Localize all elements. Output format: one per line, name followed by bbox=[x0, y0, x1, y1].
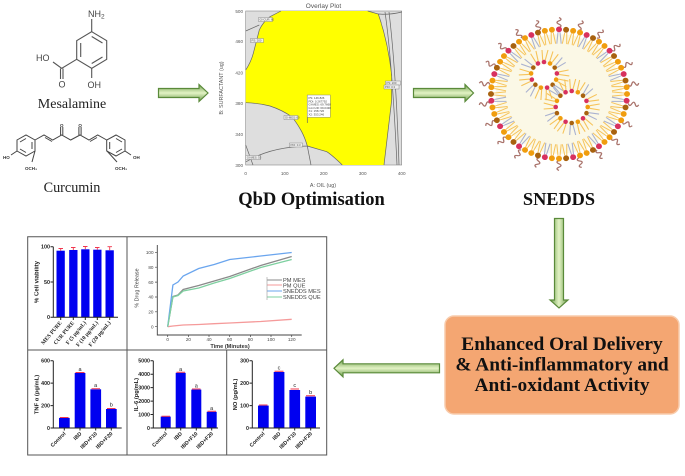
labels: IBD+F10 bbox=[279, 431, 298, 451]
tick labels: 300 bbox=[359, 171, 367, 176]
icon: mesalamine structure: HO bbox=[36, 53, 50, 63]
axis titles: A: OIL (ug) bbox=[310, 183, 336, 189]
chart: drug release: % Drug Release bbox=[134, 268, 140, 308]
tick labels: 100 bbox=[267, 337, 275, 342]
category labels: CUR PURE bbox=[53, 320, 76, 346]
prediction flag: PS: 146.826 bbox=[308, 96, 325, 100]
tick labels bbox=[235, 9, 406, 176]
tick labels: 380 bbox=[235, 101, 243, 106]
tick labels: 400 bbox=[398, 171, 406, 176]
contour lines bbox=[246, 11, 402, 165]
labels: IBD bbox=[73, 431, 84, 442]
labels: IBD bbox=[173, 431, 184, 442]
significance letters bbox=[179, 367, 214, 412]
axes bbox=[50, 247, 118, 320]
tick labels: 100 bbox=[146, 250, 154, 255]
tick labels: 100 bbox=[281, 171, 289, 176]
tick labels: 60 bbox=[227, 337, 233, 342]
axis titles bbox=[219, 61, 336, 189]
icon: curcumin structure bbox=[3, 123, 140, 171]
labels: 0 bbox=[246, 426, 249, 432]
tick labels: 340 bbox=[235, 132, 243, 137]
labels: NO (pg/mL) bbox=[233, 379, 239, 410]
labels: 100 bbox=[240, 404, 249, 410]
axes bbox=[250, 361, 320, 430]
significance letters: a bbox=[179, 367, 183, 373]
prediction flag: GI-CUR: 69.0438 bbox=[308, 106, 331, 110]
icon: curcumin structure: O bbox=[78, 123, 82, 128]
error bars bbox=[58, 246, 112, 251]
tick labels: 0 bbox=[151, 324, 154, 330]
contour labels: PS: 200 bbox=[386, 81, 397, 85]
heading: QbD Optimisation: QbD Optimisation bbox=[238, 190, 385, 210]
arrow: outcome to results bbox=[334, 360, 440, 377]
outer lipid layer bbox=[488, 27, 630, 161]
error caps bbox=[259, 371, 315, 405]
panel: outcome box bbox=[445, 316, 679, 414]
icon: mesalamine structure: O bbox=[58, 80, 66, 90]
significance letters: a bbox=[210, 406, 214, 412]
labels: 4000 bbox=[138, 372, 150, 378]
contour labels: GI-MES: 55 bbox=[247, 156, 262, 160]
bars bbox=[59, 373, 117, 428]
labels: TNF α (pg/mL) bbox=[34, 375, 40, 414]
SNEDDS QUE line bbox=[168, 260, 292, 327]
labels: IBD+F10 bbox=[180, 431, 199, 451]
arrow: structures to QbD bbox=[158, 84, 208, 102]
axis labels bbox=[34, 244, 50, 321]
labels: Control bbox=[50, 431, 68, 449]
axes bbox=[50, 361, 122, 430]
significance letters: a bbox=[195, 384, 199, 390]
contour labels: GI-MES: 60 bbox=[285, 116, 300, 120]
contour labels bbox=[246, 18, 400, 160]
icon: curcumin structure: OCH₃ bbox=[25, 166, 37, 171]
plot background bbox=[246, 11, 402, 165]
significance letters: c bbox=[293, 383, 296, 389]
icon: curcumin structure: OH bbox=[133, 155, 140, 160]
tick labels: 0 bbox=[166, 337, 169, 342]
panel: results grid frame bbox=[28, 237, 327, 455]
tick labels: 40 bbox=[206, 337, 212, 342]
legend: PM QUE bbox=[283, 283, 306, 289]
chart: IL-6 bbox=[134, 358, 218, 451]
labels: IL-6 (pg/mL) bbox=[134, 378, 140, 411]
tick labels: 300 bbox=[235, 163, 243, 168]
labels: Control bbox=[249, 431, 267, 449]
prediction flag: PDI: 0.267792 bbox=[308, 99, 327, 103]
category labels bbox=[40, 320, 113, 348]
contour labels: PDI: 0.3 bbox=[385, 85, 396, 89]
labels: 0 bbox=[47, 426, 50, 432]
labels: 1000 bbox=[138, 412, 150, 418]
prediction flag bbox=[307, 95, 331, 123]
outcome text bbox=[455, 334, 669, 396]
tick labels: 120 bbox=[288, 337, 296, 342]
category labels: MES PURE bbox=[40, 320, 64, 346]
outer polymer tails bbox=[479, 18, 639, 170]
axis titles: B: SURFACTANT (ug) bbox=[219, 61, 225, 115]
labels: 300 bbox=[240, 358, 249, 364]
outcome text: & Anti-inflammatory and bbox=[455, 354, 669, 376]
category labels: F (5 µg/mL) bbox=[64, 320, 88, 346]
legend: SNEDDS QUE bbox=[283, 295, 321, 301]
ticks bbox=[155, 252, 292, 337]
oil core bbox=[496, 34, 622, 154]
icon: mesalamine structure: OH bbox=[88, 80, 101, 90]
tick labels: 20 bbox=[186, 337, 191, 342]
illustration: inner micelle large bbox=[544, 79, 600, 135]
chart: NO bbox=[233, 358, 320, 451]
labels: IBD bbox=[272, 431, 283, 442]
tick labels: 460 bbox=[235, 39, 243, 44]
chart title: Overlay Plot bbox=[306, 3, 341, 10]
tick labels: 60 bbox=[148, 280, 154, 285]
contour labels: GI-CUR: 60 bbox=[260, 18, 275, 22]
labels: IBD+F20 bbox=[295, 431, 314, 451]
legend bbox=[267, 277, 326, 301]
yellow design space bbox=[246, 11, 392, 165]
illustration: inner micelle small bbox=[519, 50, 569, 100]
axis labels: 100 bbox=[41, 244, 50, 250]
labels: 2000 bbox=[138, 399, 150, 405]
legend: SNEDDS MES bbox=[283, 289, 321, 295]
labels: 5000 bbox=[138, 358, 150, 364]
label: Curcumin: Curcumin bbox=[44, 180, 100, 196]
label: Mesalamine: Mesalamine bbox=[38, 97, 106, 112]
tick labels: 20 bbox=[148, 310, 154, 314]
chart: TNF alpha bbox=[34, 358, 122, 451]
prediction flag: X1: 158.726 bbox=[308, 109, 324, 113]
prediction flag: GI-MES: 69.7668 bbox=[308, 103, 331, 107]
illustration: SNEDDS droplet bbox=[479, 18, 639, 170]
axis titles: Time (Minutes) bbox=[210, 344, 250, 350]
icon: curcumin structure: HO bbox=[3, 155, 10, 160]
chart: drug release bbox=[134, 245, 326, 350]
bars bbox=[258, 372, 316, 428]
category labels: F (20 µg/mL) bbox=[87, 320, 113, 348]
error caps bbox=[162, 372, 216, 416]
prediction flag: X2: 353.246 bbox=[308, 112, 324, 116]
PM QUE line bbox=[168, 319, 292, 327]
significance letters bbox=[78, 367, 113, 408]
contour labels: PS: 200 bbox=[252, 38, 262, 42]
error caps bbox=[60, 372, 116, 418]
axis labels: 0 bbox=[47, 315, 50, 321]
significance letters: a bbox=[94, 383, 98, 389]
outcome text: Anti-oxidant Activity bbox=[474, 375, 650, 396]
viability bars bbox=[56, 249, 114, 317]
icon: curcumin structure: OCH₃ bbox=[115, 166, 127, 171]
PM MES line bbox=[168, 256, 292, 327]
significance letters: a bbox=[78, 367, 82, 373]
arrow: QbD to SNEDDS bbox=[414, 84, 474, 102]
labels: 3000 bbox=[138, 386, 150, 392]
axis labels: 50 bbox=[44, 280, 50, 286]
chart: overlay plot bbox=[219, 3, 406, 189]
labels: 0 bbox=[147, 426, 150, 432]
labels bbox=[134, 358, 215, 451]
icon: mesalamine structure: NH bbox=[88, 9, 101, 19]
tick labels: 200 bbox=[320, 171, 328, 176]
significance letters bbox=[278, 366, 312, 396]
tick labels: 0 bbox=[244, 171, 247, 176]
legend: PM MES bbox=[283, 278, 306, 284]
icon: mesalamine structure: 2 bbox=[101, 14, 105, 20]
significance letters: b bbox=[110, 402, 113, 408]
labels: 200 bbox=[240, 381, 249, 387]
tick labels bbox=[146, 250, 296, 342]
axes bbox=[157, 245, 302, 335]
SNEDDS MES line bbox=[168, 252, 292, 327]
tick labels: 80 bbox=[248, 337, 253, 342]
labels: Control bbox=[151, 431, 169, 449]
category labels: F (10 µg/mL) bbox=[75, 320, 100, 348]
bars bbox=[161, 373, 217, 428]
labels: IBD+F10 bbox=[80, 431, 99, 451]
arrow: SNEDDS to outcome bbox=[550, 218, 568, 308]
icon: curcumin structure: O bbox=[60, 123, 64, 128]
labels: IBD+F20 bbox=[95, 431, 114, 451]
contour labels: PDI: 0.3 bbox=[290, 143, 301, 147]
tick labels: 40 bbox=[148, 294, 154, 300]
labels: 200 bbox=[41, 404, 50, 410]
heading: SNEDDS: SNEDDS bbox=[523, 189, 595, 209]
labels: IBD+F20 bbox=[196, 431, 215, 451]
outcome text: Enhanced Oral Delivery bbox=[461, 334, 663, 355]
tick labels: 420 bbox=[235, 70, 243, 76]
axis labels: % Cell viability bbox=[34, 260, 40, 303]
labels bbox=[34, 358, 114, 451]
labels: 600 bbox=[41, 358, 50, 364]
significance letters: b bbox=[309, 390, 312, 396]
labels: 400 bbox=[41, 381, 50, 387]
tick labels: 80 bbox=[148, 265, 154, 270]
tick labels: 500 bbox=[235, 9, 243, 14]
chart: cell viability bbox=[34, 244, 118, 348]
significance letters: c bbox=[278, 366, 281, 372]
axes bbox=[150, 361, 218, 430]
labels bbox=[233, 358, 314, 451]
icon: mesalamine structure bbox=[36, 9, 107, 90]
